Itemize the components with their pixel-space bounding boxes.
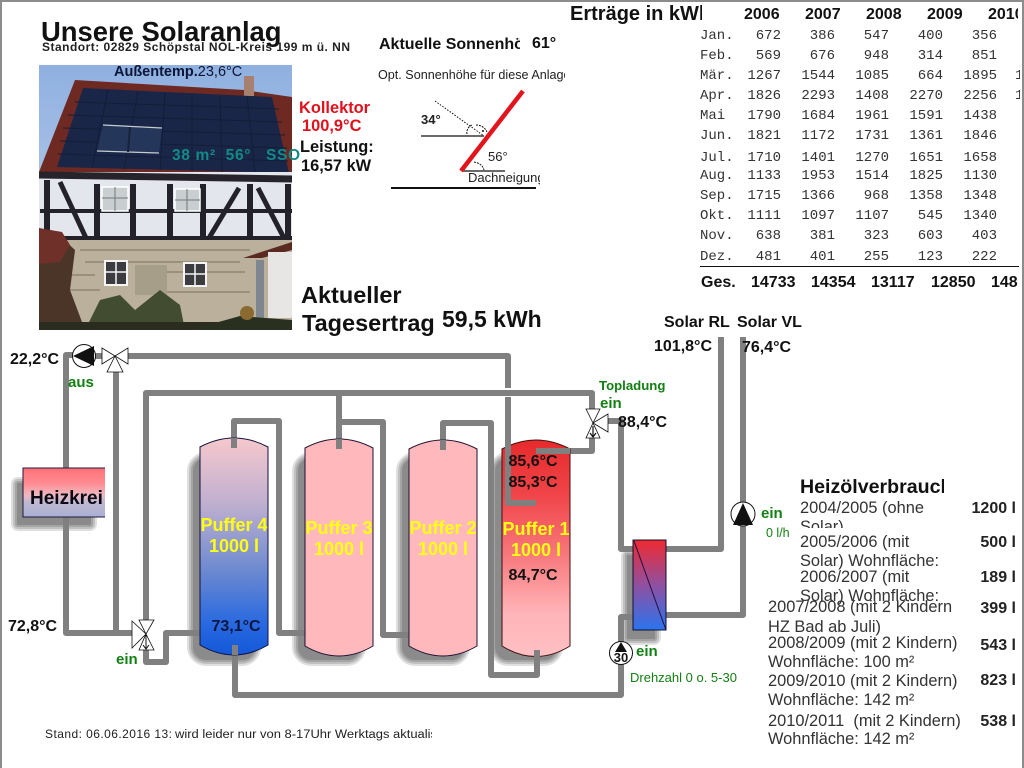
roof window [97, 125, 162, 153]
title: Unsere Solaranlage [41, 16, 297, 47]
roof [39, 80, 292, 182]
monthly rows: 1366 [801, 188, 835, 204]
totals row: 14733 [751, 274, 796, 291]
monthly rows: 1267 [747, 68, 781, 84]
roof angle diagram: 34° [421, 112, 441, 127]
photo: house with solar roof [39, 65, 292, 330]
label: top loading [599, 378, 668, 431]
label: solar pump status [761, 505, 790, 540]
label: top loading: ein [600, 395, 622, 412]
monthly rows: 1544 [801, 68, 835, 84]
tank: Puffer 1: 84,7°C [508, 567, 558, 584]
monthly rows: 1358 [909, 188, 943, 204]
heating oil rows: 2006/2007 (mit [800, 568, 910, 586]
tank: Puffer 2: Puffer 2 [409, 518, 477, 538]
monthly rows: 2256 [963, 88, 997, 104]
monthly rows: Sep. [700, 188, 734, 204]
monthly rows: 1133 [747, 168, 781, 184]
heating oil rows: Wohnfläche: 142 m² [768, 730, 915, 748]
label: solar flow: 76,4°C [742, 339, 792, 356]
label: solar flow [737, 314, 802, 356]
tank: Puffer 1: Puffer 1 [502, 519, 570, 539]
tank: Puffer 4: 73,1°C [211, 618, 261, 635]
heating oil rows: Wohnfläche: 100 m² [768, 653, 915, 671]
label: solar flow: Solar VL [737, 314, 802, 331]
pipes [66, 337, 743, 695]
totals row: 12850 [931, 274, 976, 291]
monthly rows: 1438 [963, 108, 997, 124]
monthly rows: 672 [756, 28, 781, 44]
tank: Puffer 4 [200, 438, 268, 655]
daily yield: Aktueller [301, 282, 402, 308]
sun height heading [379, 37, 556, 49]
label: solar return [654, 314, 730, 355]
heat exchanger [633, 540, 666, 630]
label: exchanger pump status: Drehzahl 0 o. 5-30 [630, 670, 737, 685]
label: top loading: Topladung [599, 378, 665, 393]
monthly rows: Jun. [700, 128, 734, 144]
roof angle diagram: 56° [488, 149, 508, 164]
label: valve on: ein [116, 651, 138, 668]
monthly rows: 1821 [747, 128, 781, 144]
label: solar return: Solar RL [664, 314, 730, 331]
heating oil values: 543 l [980, 637, 1016, 654]
monthly rows: 1401 [801, 150, 835, 166]
monthly rows: 1 [1015, 68, 1023, 84]
half-timbered wall [39, 172, 292, 242]
heating oil panel [768, 476, 1016, 748]
monthly rows: 664 [918, 68, 943, 84]
monthly rows: 323 [864, 228, 889, 244]
heating circuit box: Heizkreis [30, 488, 113, 509]
heating oil values: 189 l [980, 569, 1016, 586]
monthly rows: 547 [864, 28, 889, 44]
heating oil rows: 2010/2011 (mit 2 Kindern) [768, 712, 961, 730]
roof specs: 38 m² 56° SSO [172, 147, 300, 164]
year headers: 2009 [927, 6, 963, 23]
label: top loading: 88,4°C [618, 414, 668, 431]
year headers: 2008 [866, 6, 902, 23]
pump: speed-controlled [610, 642, 632, 665]
monthly rows: 603 [918, 228, 943, 244]
upper windows [102, 187, 128, 211]
totals row: Ges. [701, 274, 736, 291]
monthly rows: 356 [972, 28, 997, 44]
heating oil rows [768, 499, 961, 748]
monthly rows: 851 [972, 48, 997, 64]
monthly rows: 1097 [801, 208, 835, 224]
sun height heading: Aktuelle Sonnenhöhe [379, 36, 543, 53]
collector readout: 100,9°C [302, 117, 362, 135]
tank: Puffer 2 [409, 440, 477, 656]
heating oil values: 823 l [980, 672, 1016, 689]
label: solar return: 101,8°C [654, 338, 712, 355]
monthly rows: Jul. [700, 150, 734, 166]
tank: Puffer 3 [305, 439, 373, 656]
monthly rows: 1651 [909, 150, 943, 166]
monthly rows: 968 [864, 188, 889, 204]
chimney [244, 76, 254, 96]
monthly rows: 255 [864, 249, 889, 265]
monthly rows: 569 [756, 48, 781, 64]
monthly rows: 1895 [963, 68, 997, 84]
monthly rows: 386 [810, 28, 835, 44]
status note [46, 729, 432, 740]
monthly rows: Jan. [700, 28, 734, 44]
monthly rows [700, 28, 1023, 265]
monthly rows: 222 [972, 249, 997, 265]
totals row: 13117 [871, 274, 915, 291]
monthly rows: 1790 [747, 108, 781, 124]
daily yield: Tagesertrag [302, 310, 435, 336]
pump: solar circuit [731, 502, 755, 526]
monthly rows: 1130 [963, 168, 997, 184]
sun height heading: 61° [532, 35, 556, 52]
heating oil rows: Solar) Wohnfläche: [800, 552, 939, 570]
heating oil values: 399 l [980, 600, 1016, 617]
valve: top loading [586, 409, 608, 438]
yield table [700, 6, 1024, 291]
tank: Puffer 2: 1000 l [418, 539, 468, 559]
tank: Puffer 3: 1000 l [314, 539, 364, 559]
heating oil heading: Heizölverbrauch [800, 476, 952, 498]
annex [243, 242, 292, 322]
collector readout: 16,57 kW [301, 157, 372, 175]
monthly rows: 948 [864, 48, 889, 64]
tank: Puffer 1: 85,3°C [508, 474, 558, 491]
tank: Puffer 4: Puffer 4 [200, 515, 268, 535]
monthly rows: 1 [1015, 88, 1023, 104]
daily yield: 59,5 kWh [442, 306, 542, 332]
year headers [744, 8, 1018, 19]
valve: heating top [102, 348, 128, 372]
monthly rows: 481 [756, 249, 781, 265]
monthly rows: 1270 [855, 150, 889, 166]
solar panels [57, 88, 289, 173]
label: pump off: aus [68, 374, 94, 391]
tank: Puffer 1 [502, 440, 570, 657]
monthly rows: 1684 [801, 108, 835, 124]
monthly rows: 1408 [855, 88, 889, 104]
monthly rows: 1961 [855, 108, 889, 124]
monthly rows: 1826 [747, 88, 781, 104]
heating oil rows: Solar) [800, 518, 844, 536]
stone ground floor [67, 240, 292, 322]
roof angle diagram [391, 91, 545, 188]
monthly rows: 401 [810, 249, 835, 265]
monthly rows: 676 [810, 48, 835, 64]
heating oil values: 538 l [980, 713, 1016, 730]
monthly rows: 314 [918, 48, 943, 64]
tank: Puffer 1: 85,6°C [508, 453, 558, 470]
heating oil rows: 2009/2010 (mit 2 Kindern) [768, 672, 958, 690]
monthly rows: 400 [918, 28, 943, 44]
monthly rows: 1085 [855, 68, 889, 84]
collector readout [299, 99, 374, 175]
outside temperature: Außentemp.23,6°C [114, 64, 242, 80]
monthly rows: Mär. [700, 68, 734, 84]
monthly rows: 1825 [909, 168, 943, 184]
totals row: 14354 [811, 274, 856, 291]
heating oil values: 500 l [980, 534, 1016, 551]
monthly rows: 1591 [909, 108, 943, 124]
label: return temperature: 22,2°C [10, 351, 60, 368]
optimal sun height: Opt. Sonnenhöhe für diese Anlage [378, 68, 571, 82]
pump: heating circuit [72, 344, 96, 368]
monthly rows: 1846 [963, 128, 997, 144]
monthly rows: 2270 [909, 88, 943, 104]
monthly rows: Feb. [700, 48, 734, 64]
plants [39, 228, 292, 330]
monthly rows: 638 [756, 228, 781, 244]
monthly rows: 1340 [963, 208, 997, 224]
heating oil rows: 2005/2006 (mit [800, 533, 910, 551]
totals row: 148 [991, 274, 1018, 291]
monthly rows: 381 [810, 228, 835, 244]
tank: Puffer 1: 1000 l [511, 540, 561, 560]
monthly rows: 123 [918, 249, 943, 265]
monthly rows: 1348 [963, 188, 997, 204]
heating oil rows: Solar) Wohnfläche: [800, 587, 939, 605]
heating circuit box [23, 468, 113, 517]
heating oil values: 1200 l [972, 500, 1016, 517]
valve: heating return [132, 620, 154, 650]
year headers: 2010 [988, 6, 1024, 23]
label: solar pump status: 0 l/h [766, 526, 790, 540]
pump: speed-controlled: 30 [614, 650, 628, 665]
heating oil rows: HZ Bad ab Juli) [768, 618, 881, 636]
monthly rows: 1172 [801, 128, 835, 144]
heating oil rows: 2007/2008 (mit 2 Kindern [768, 598, 952, 616]
monthly rows: 1107 [855, 208, 889, 224]
status note: wird leider nur von 8-17Uhr Werktags aktualisiert [174, 729, 456, 741]
heating oil values [972, 500, 1016, 730]
roof angle diagram: Dachneigung [468, 170, 545, 185]
monthly rows: Mai [700, 108, 725, 124]
monthly rows: Apr. [700, 88, 734, 104]
tank shadows [18, 459, 654, 659]
monthly rows: Okt. [700, 208, 734, 224]
monthly rows: 1953 [801, 168, 835, 184]
monthly rows: Nov. [700, 228, 734, 244]
label: exchanger pump status: ein [636, 643, 658, 660]
monthly rows: 2293 [801, 88, 835, 104]
heating oil rows: Wohnfläche: 142 m² [768, 691, 915, 709]
monthly rows: 1111 [747, 208, 781, 224]
monthly rows: 1514 [855, 168, 889, 184]
daily yield [301, 282, 542, 336]
label: flow temperature: 72,8°C [8, 618, 58, 635]
status note: Stand: 06.06.2016 13: [45, 727, 172, 741]
monthly rows: Dez. [700, 249, 734, 265]
monthly rows: Aug. [700, 168, 734, 184]
tank: Puffer 4: 1000 l [209, 536, 259, 556]
monthly rows: 1731 [855, 128, 889, 144]
monthly rows: 545 [918, 208, 943, 224]
heating oil rows: 2004/2005 (ohne [800, 499, 924, 517]
collector readout: Leistung: [300, 138, 374, 156]
location line: Standort: 02829 Schöpstal NOL-Kreis 199 m ü. NN [42, 40, 350, 54]
heating oil rows: 2008/2009 (mit 2 Kindern) [768, 634, 958, 652]
monthly rows: 1658 [963, 150, 997, 166]
monthly rows: 1361 [909, 128, 943, 144]
yield heading: Erträge in kWh [570, 3, 711, 25]
totals row [702, 276, 1018, 287]
tank: Puffer 3: Puffer 3 [305, 518, 373, 538]
year headers: 2007 [805, 6, 841, 23]
collector readout: Kollektor [299, 99, 371, 117]
label: exchanger pump status [630, 643, 737, 685]
monthly rows: 1715 [747, 188, 781, 204]
monthly rows: 1710 [747, 150, 781, 166]
monthly rows: 403 [972, 228, 997, 244]
year headers: 2006 [744, 6, 780, 23]
label: solar pump status: ein [761, 505, 783, 522]
